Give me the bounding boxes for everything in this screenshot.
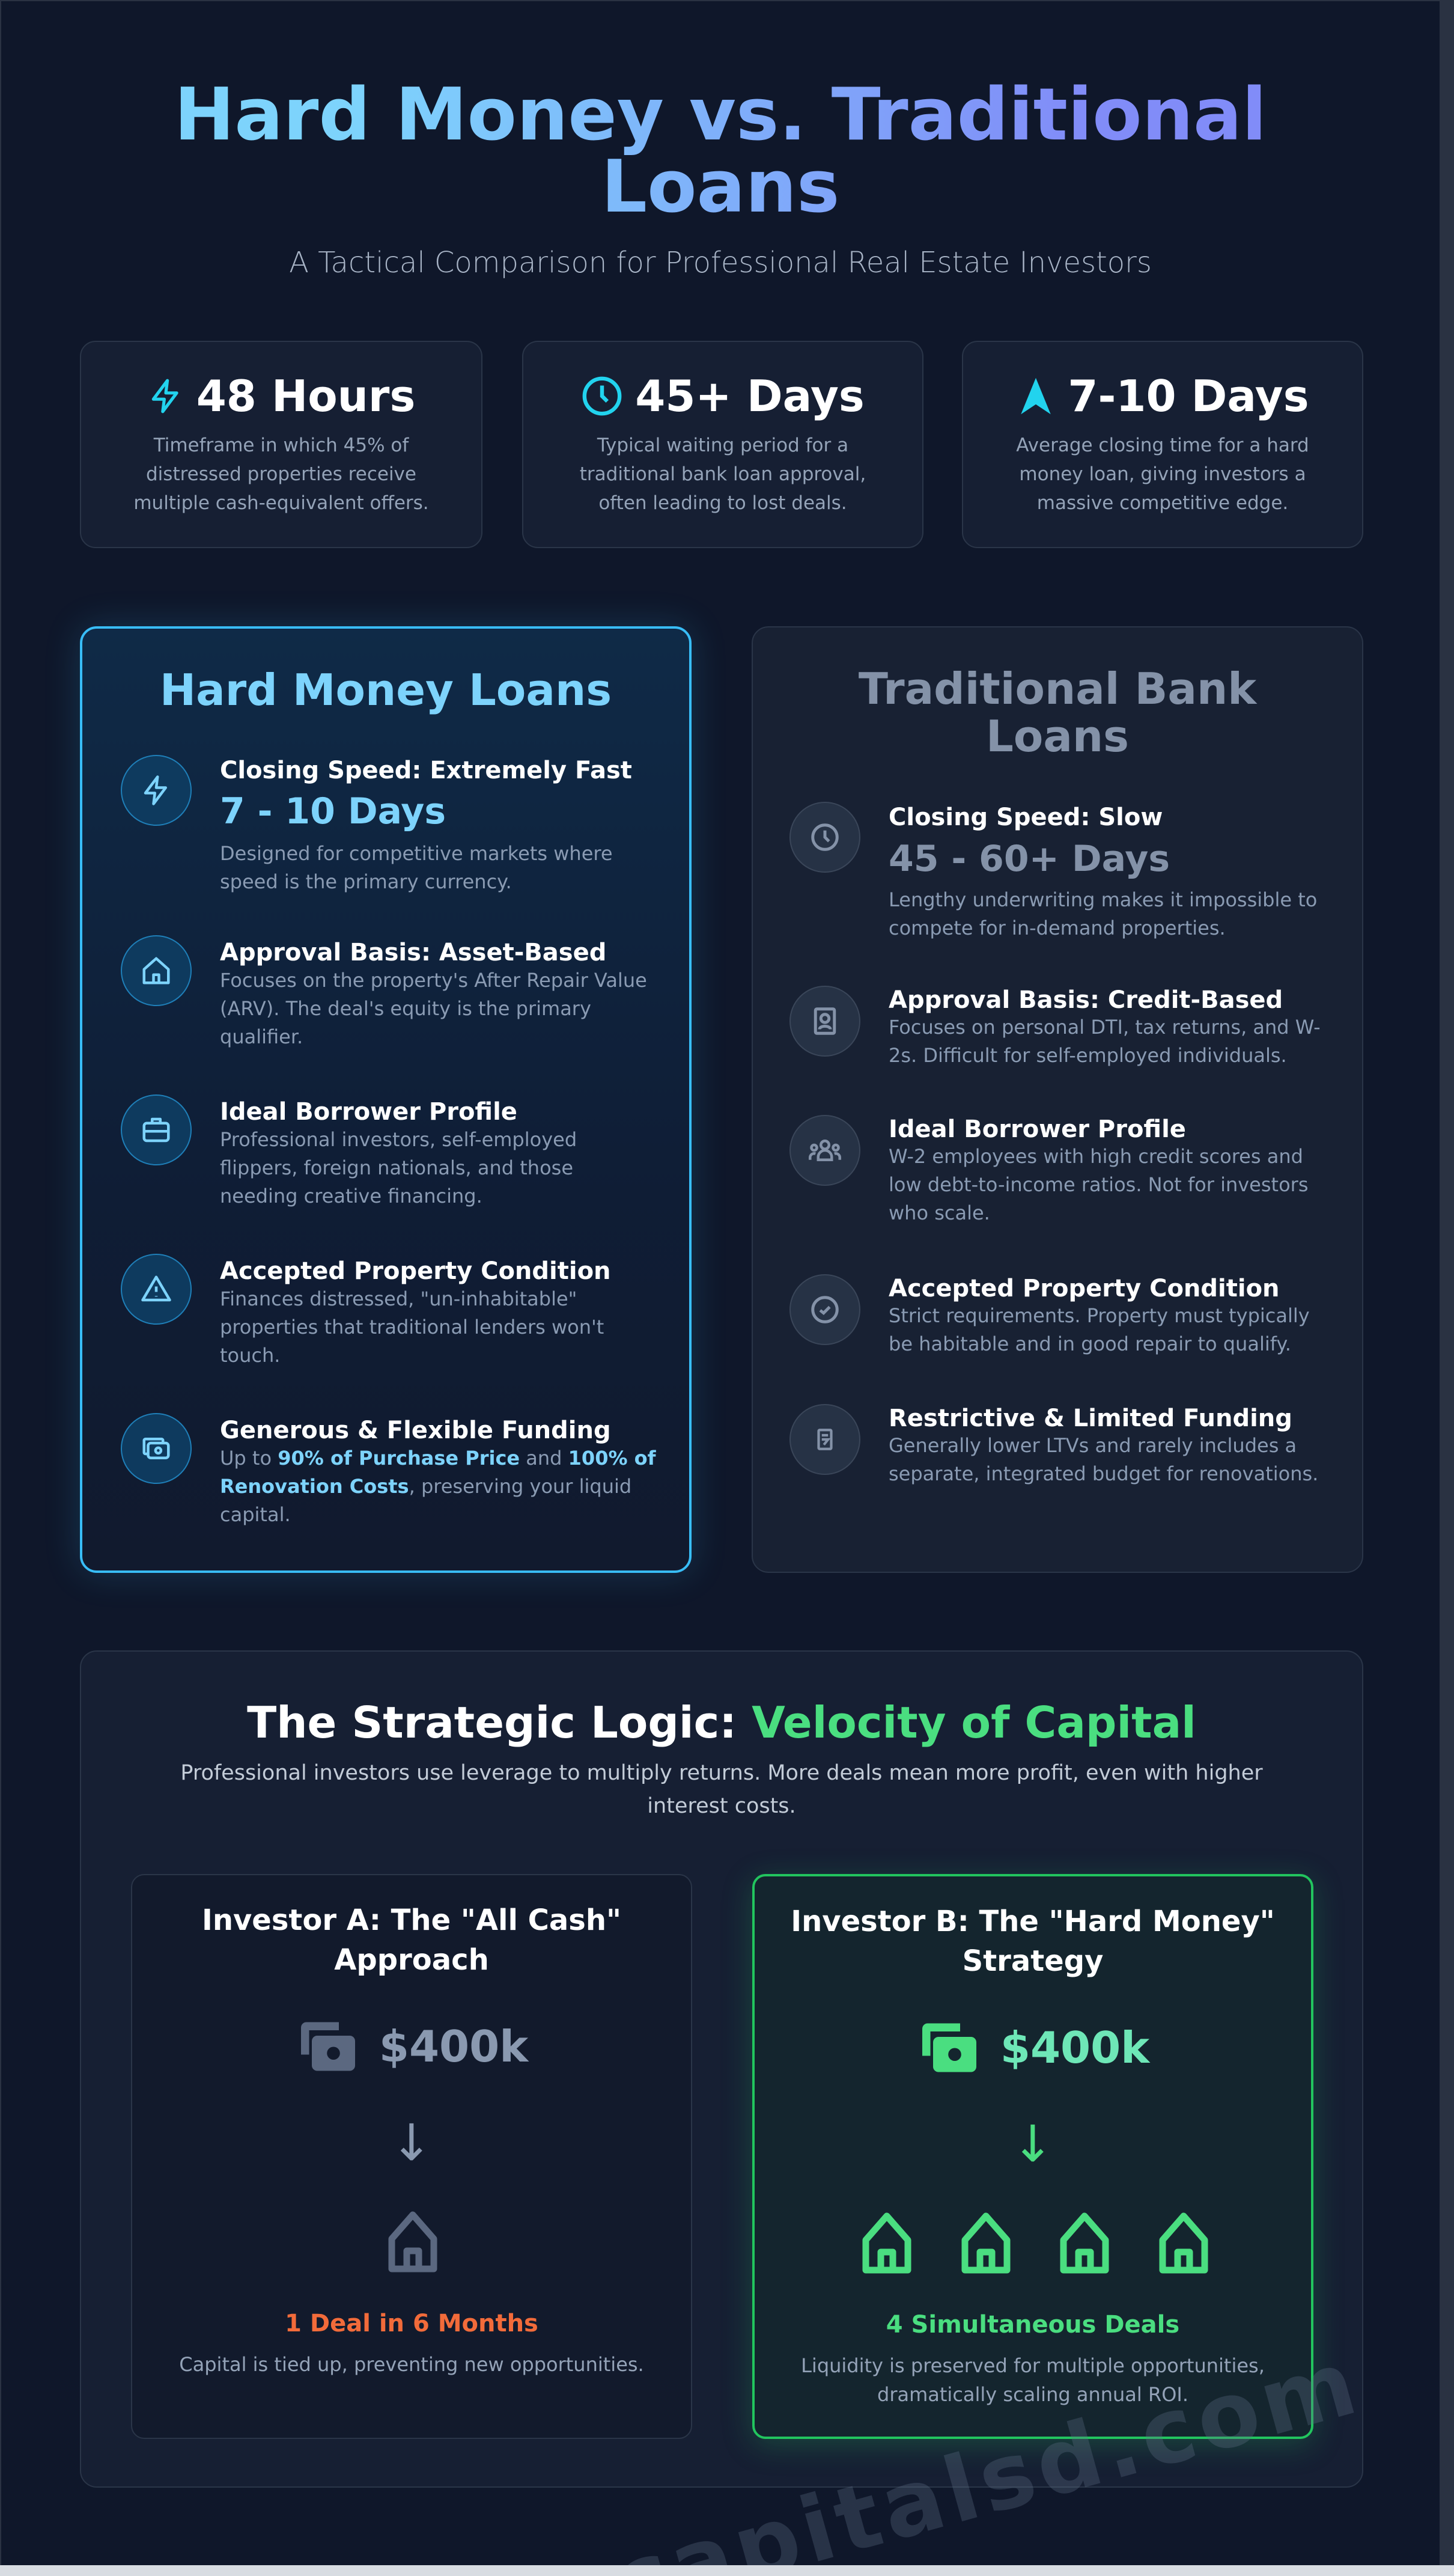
item: borrower profile: W-2 employees with high credit scores and low debt-to-income ratios. Not for investors who scale.	[889, 1145, 1308, 1224]
item: property condition: Finances distressed, "un-inhabitable" properties that traditional lenders won't touch.	[220, 1287, 604, 1367]
stat description: Timeframe in which 45% of distressed properties receive multiple cash-equivalent offers.	[133, 435, 429, 514]
stat heading: 48 Hours	[196, 371, 415, 421]
capital amount	[301, 2021, 529, 2072]
icon: lightning	[121, 755, 192, 826]
card title: Investor B: The "Hard Money"	[791, 1905, 1275, 1938]
item: borrower profile: Professional investors, self-employed flippers, foreign nationals, and those needing creative financing.	[220, 1128, 577, 1207]
stat description: Average closing time for a hard money loan, giving investors a massive competitive edge.	[1016, 435, 1309, 514]
result description: Capital is tied up, preventing new opportunities.	[179, 2353, 644, 2376]
item: funding	[121, 1413, 656, 1526]
icon: house	[121, 935, 192, 1006]
arrow: ↓	[1012, 2114, 1054, 2173]
panel: strategic logic	[80, 1650, 1363, 2488]
icon: warning	[121, 1254, 192, 1325]
item: funding: Generous & Flexible Funding	[220, 1417, 611, 1444]
item: closing speed	[121, 755, 632, 893]
stat card: 7-10 days	[962, 341, 1363, 548]
card title: Investor A: The "All Cash"	[202, 1903, 621, 1937]
panel heading	[859, 664, 1257, 762]
item: property condition	[121, 1254, 611, 1367]
item: approval basis	[789, 986, 1321, 1067]
item: approval basis: Approval Basis: Asset-Based	[220, 939, 606, 966]
panel: hard money loans	[80, 626, 692, 1573]
item: property condition: Strict requirements. Property must typically be habitable and in good repair to qualify.	[889, 1304, 1310, 1355]
card: investor A	[131, 1874, 692, 2439]
icon: credit report	[789, 986, 860, 1057]
item: property condition: Accepted Property Condition	[220, 1257, 611, 1285]
stat heading: 45+ Days	[635, 371, 865, 421]
item: approval basis: Approval Basis: Credit-Based	[889, 986, 1283, 1014]
section description: Professional investors use leverage to multiply returns. More deals mean more profit, even with higher interest costs.	[180, 1761, 1263, 1818]
stat card: 48 hours	[80, 341, 482, 548]
icon: check	[789, 1274, 860, 1345]
card title: Strategy	[963, 1944, 1103, 1978]
item: funding: Generally lower LTVs and rarely includes a separate, integrated budget for renovations.	[889, 1434, 1318, 1485]
item: closing speed: Closing Speed: Extremely Fast	[220, 757, 632, 784]
card title	[791, 1905, 1275, 1978]
stat heading: 7-10 Days	[1068, 371, 1309, 421]
item: borrower profile	[121, 1094, 577, 1207]
item: funding: Restrictive & Limited Funding	[889, 1405, 1292, 1432]
card title: Approach	[334, 1943, 489, 1977]
icon: house	[388, 2212, 437, 2272]
arrow: ↓	[391, 2113, 433, 2172]
section heading: The Strategic Logic: Velocity of Capital	[247, 1697, 1196, 1748]
icon: money	[121, 1413, 192, 1484]
item: approval basis	[121, 935, 647, 1048]
title	[1, 79, 1440, 224]
result: 4 Simultaneous Deals	[886, 2311, 1179, 2339]
title: Hard Money vs. Traditional	[174, 73, 1267, 157]
item: funding	[789, 1404, 1318, 1485]
item: borrower profile: Ideal Borrower Profile	[889, 1116, 1186, 1143]
item: closing speed: 7 - 10 Days	[220, 790, 446, 832]
icon: receipt	[789, 1404, 860, 1475]
result: 1 Deal in 6 Months	[285, 2310, 538, 2337]
item: closing speed: Lengthy underwriting makes it impossible to compete for in-demand properties.	[889, 888, 1317, 939]
panel heading: Traditional Bank	[859, 664, 1256, 714]
icon: clock	[789, 802, 860, 873]
stat description: Typical waiting period for a traditional bank loan approval, often leading to lost deals.	[580, 435, 866, 514]
item: borrower profile	[789, 1115, 1308, 1224]
item: funding: Up to 90% of Purchase Price and 100% of Renovation Costs, preserving your liquid capital.	[220, 1447, 656, 1526]
item: approval basis: Focuses on personal DTI, tax returns, and W-2s. Difficult for self-employed individuals.	[889, 1016, 1321, 1067]
title: Loans	[601, 145, 839, 229]
item: property condition	[789, 1274, 1310, 1355]
icon: briefcase	[121, 1094, 192, 1165]
item: closing speed: Designed for competitive markets where speed is the primary currency.	[220, 842, 613, 893]
item: closing speed: 45 - 60+ Days	[889, 838, 1170, 880]
item: closing speed: Closing Speed: Slow	[889, 804, 1163, 831]
icon: four houses	[863, 2213, 1208, 2273]
capital amount: $400k	[379, 2021, 528, 2072]
item: approval basis: Focuses on the property's After Repair Value (ARV). The deal's equity is the primary qualifier.	[220, 969, 647, 1048]
result description: Liquidity is preserved for multiple opportunities, dramatically scaling annual ROI.	[801, 2354, 1265, 2406]
item: borrower profile: Ideal Borrower Profile	[220, 1098, 517, 1126]
icon: people	[789, 1115, 860, 1186]
panel: traditional bank loans	[752, 626, 1363, 1573]
item: closing speed	[789, 802, 1317, 939]
subtitle: A Tactical Comparison for Professional Real Estate Investors	[289, 246, 1152, 279]
item: property condition: Accepted Property Condition	[889, 1275, 1280, 1302]
card title	[202, 1903, 621, 1977]
stat card: 45+ days	[522, 341, 923, 548]
panel heading: Hard Money Loans	[160, 665, 612, 715]
capital amount	[922, 2022, 1150, 2073]
panel heading: Loans	[986, 711, 1129, 762]
capital amount: $400k	[1000, 2022, 1149, 2073]
card: investor B	[752, 1874, 1313, 2439]
